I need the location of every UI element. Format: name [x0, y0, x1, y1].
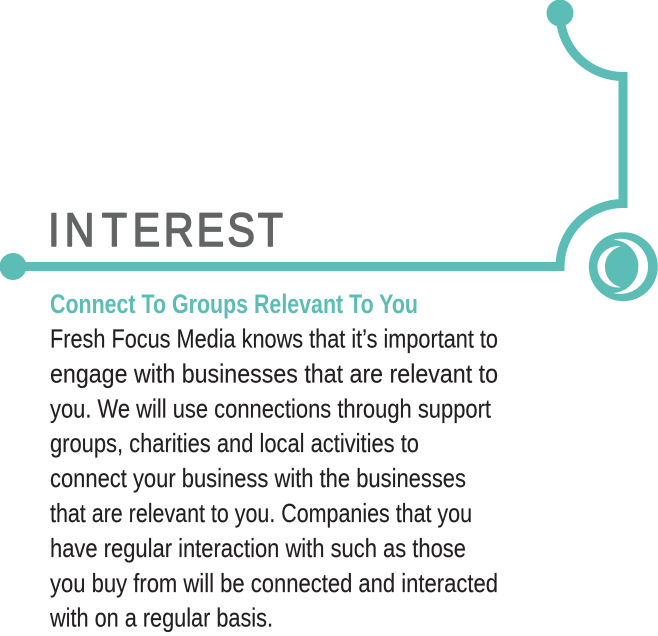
body text: connect your business with the businesses	[50, 463, 466, 493]
body text: Fresh Focus Media knows that it’s important to	[50, 324, 498, 354]
body text: that are relevant to you. Companies that you	[50, 498, 472, 528]
body text: groups, charities and local activities to	[50, 428, 419, 458]
body text: you. We will use connections through support	[50, 393, 492, 423]
body text	[49, 324, 498, 633]
subheading: Connect To Groups Relevant To You	[50, 289, 418, 319]
connector line	[0, 0, 623, 280]
body text: you buy from will be connected and interacted	[50, 568, 498, 598]
node: top dot	[546, 0, 574, 26]
body text: with on a regular basis.	[49, 603, 273, 633]
body text: engage with businesses that are relevant to	[50, 358, 498, 388]
connector path	[13, 14, 623, 266]
title: INTEREST	[48, 205, 283, 257]
node: left dot	[0, 253, 26, 280]
icon: ring with crescents	[589, 232, 658, 301]
body text: have regular interaction with such as those	[50, 533, 466, 563]
